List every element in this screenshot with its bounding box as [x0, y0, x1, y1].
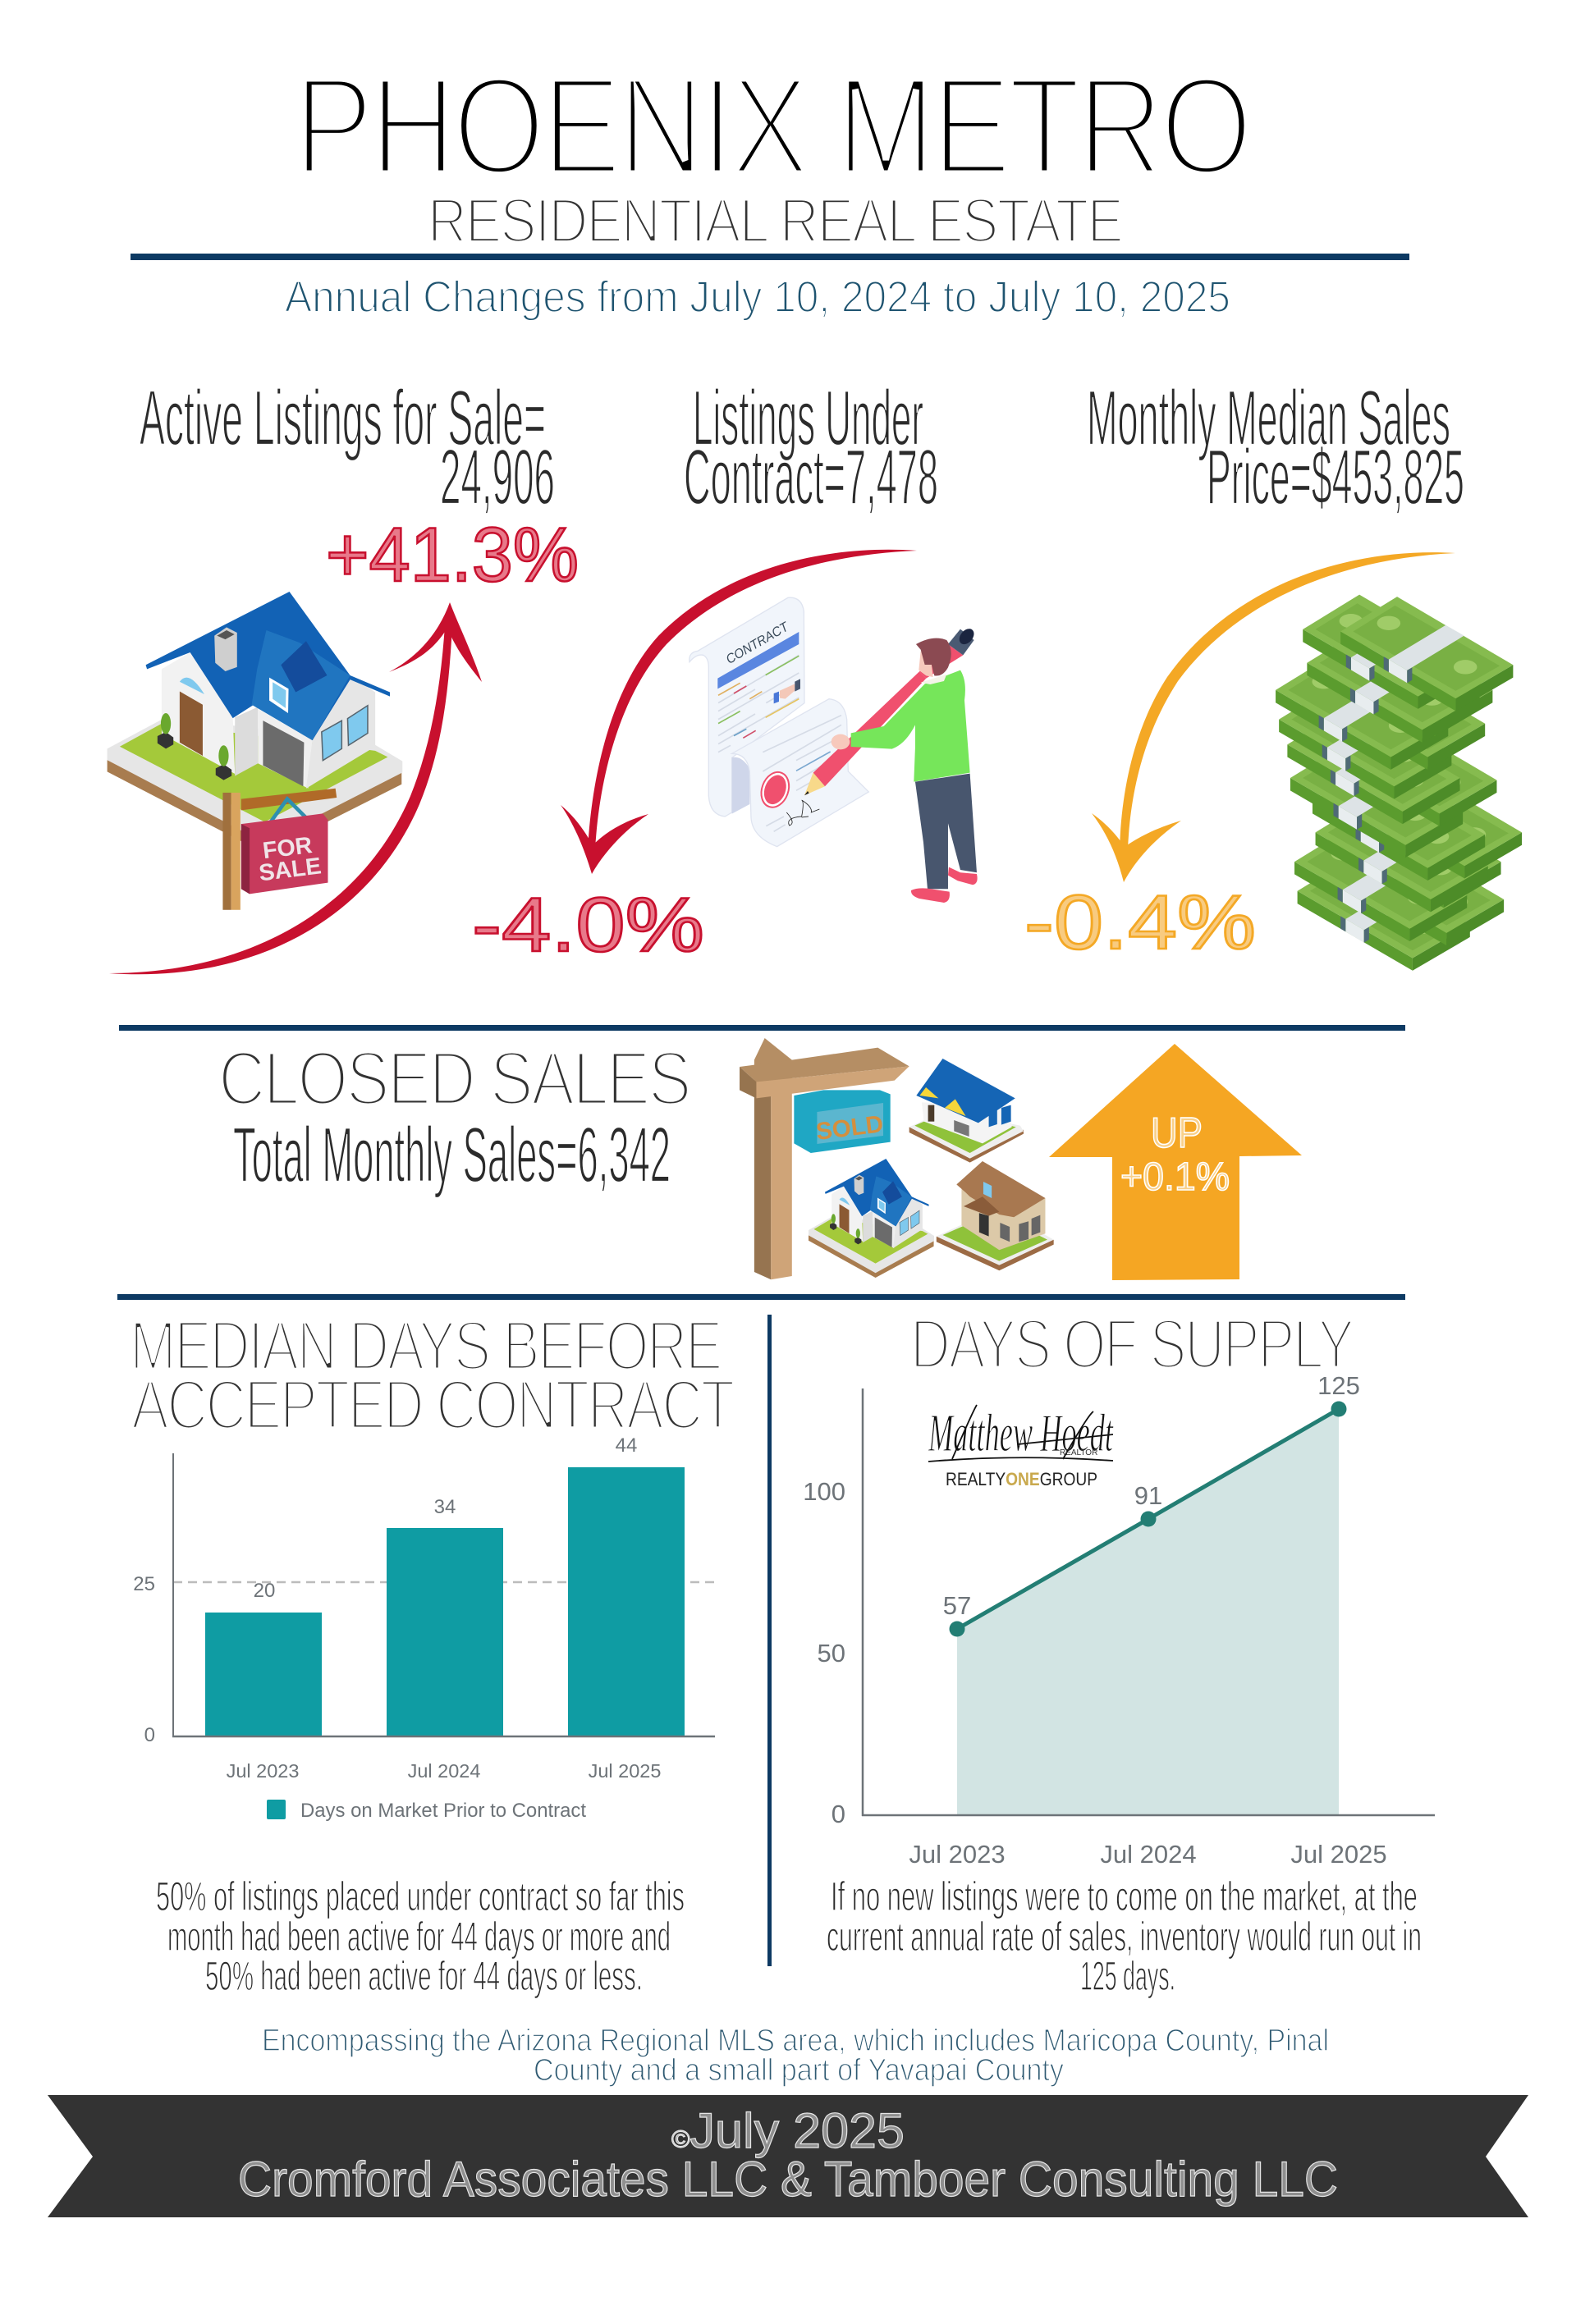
date range heading: Annual Changes from July 10, 2024 to July 10, 2025 — [285, 272, 1230, 322]
under contract label — [684, 374, 938, 521]
arrow: down red — [561, 550, 917, 874]
active listings change: +41.3% — [326, 511, 579, 597]
logo: signature and brokerage: Matthew Hoedt — [928, 1403, 1114, 1463]
footer banner: ©July 2025 — [671, 2103, 905, 2158]
median days heading: MEDIAN DAYS BEFORE — [130, 1307, 721, 1385]
median days note: 50% had been active for 44 days or less. — [205, 1953, 643, 1999]
panel: under contract: Listings Under — [693, 374, 923, 462]
icon: house blue roof top — [909, 1059, 1024, 1163]
panel: closed sales — [218, 1036, 1302, 1280]
bar chart: 44 — [616, 1434, 637, 1457]
icon: house for sale: FOR — [261, 832, 314, 864]
icon: sold sign: SOLD — [814, 1110, 885, 1146]
footer banner: Cromford Associates LLC & Tamboer Consulting LLC — [238, 2152, 1338, 2207]
days of supply note: 125 days. — [1080, 1953, 1175, 1999]
area line chart: 57 — [943, 1591, 971, 1620]
area line chart: Jul 2023 — [909, 1840, 1006, 1869]
coverage note: County and a small part of Yavapai County — [534, 2053, 1064, 2088]
median price change: -0.4% — [1024, 879, 1256, 965]
median days note: 50% of listings placed under contract so far this — [156, 1873, 685, 1919]
panel: days of supply — [803, 1306, 1435, 1999]
bar chart: 34 — [434, 1496, 456, 1518]
under contract change: -4.0% — [472, 881, 704, 968]
area line chart: 0 — [832, 1800, 845, 1828]
bar chart: Jul 2024 — [408, 1760, 480, 1782]
arrow: up red — [109, 602, 482, 974]
icon: house brown roof — [937, 1161, 1054, 1270]
icon: money stack — [1276, 595, 1522, 971]
arrow: up orange with percent: UP — [1151, 1109, 1203, 1157]
logo: signature and brokerage: REALTYONEGROUP — [946, 1469, 1097, 1489]
chart legend: Days on Market Prior to Contract — [300, 1800, 586, 1822]
panel: median sales price — [1024, 374, 1522, 971]
arrow: up orange with percent: +0.1% — [1120, 1155, 1230, 1199]
median days note — [156, 1873, 685, 1999]
closed sales heading: CLOSED SALES — [218, 1036, 690, 1121]
median days note: month had been active for 44 days or more and — [167, 1914, 671, 1960]
title: PHOENIX METRO — [294, 48, 1249, 204]
icon: sold sign — [740, 1038, 909, 1279]
logo: signature and brokerage: REALTOR — [1060, 1448, 1097, 1457]
days of supply heading: DAYS OF SUPPLY — [910, 1306, 1354, 1384]
panel: active listings: Active Listings for Sale= — [140, 374, 546, 462]
bar chart: Jul 2025 — [589, 1760, 661, 1782]
icon: house for sale — [108, 592, 402, 910]
panel: active listings: 24,906 — [440, 433, 555, 521]
area line chart — [803, 1371, 1435, 1869]
icon: contract and person signing: CONTRACT — [724, 620, 792, 667]
bar chart: Jul 2023 — [227, 1760, 299, 1782]
panel: under contract: Contract=7,478 — [684, 433, 938, 521]
bar chart: 20 — [254, 1580, 275, 1602]
area line chart: 100 — [803, 1477, 845, 1506]
area line chart: Jul 2025 — [1290, 1840, 1387, 1869]
arrow: up orange with percent — [1049, 1044, 1302, 1280]
panel: median days before accepted contract — [130, 1307, 734, 1999]
median days heading: ACCEPTED CONTRACT — [131, 1366, 734, 1444]
logo: signature and brokerage — [928, 1403, 1114, 1489]
area line chart: 50 — [818, 1639, 845, 1668]
panel: closed sales: Total Monthly Sales=6,342 — [233, 1111, 671, 1199]
area line chart: 91 — [1134, 1481, 1162, 1510]
days of supply note — [827, 1873, 1422, 1999]
area line chart: Jul 2024 — [1100, 1840, 1197, 1869]
bar chart: 25 — [133, 1573, 155, 1595]
icon: house for sale: SALE — [258, 853, 323, 886]
panel: active listings — [108, 374, 579, 974]
panel: under contract — [472, 374, 978, 968]
coverage note — [262, 2024, 1329, 2088]
icon: contract and person signing — [690, 597, 978, 903]
subtitle: RESIDENTIAL REAL ESTATE — [428, 186, 1122, 256]
active listings label — [140, 374, 555, 521]
bar chart: 0 — [144, 1724, 155, 1746]
median price label — [1087, 374, 1464, 521]
bar chart — [133, 1434, 715, 1822]
median days heading — [130, 1307, 734, 1444]
coverage note: Encompassing the Arizona Regional MLS area, which includes Maricopa County, Pinal — [262, 2024, 1329, 2058]
arrow: down orange — [1092, 552, 1455, 882]
area line chart: 125 — [1317, 1371, 1360, 1400]
footer banner — [48, 2095, 1528, 2217]
icon: house blue roof lower — [809, 1159, 934, 1278]
